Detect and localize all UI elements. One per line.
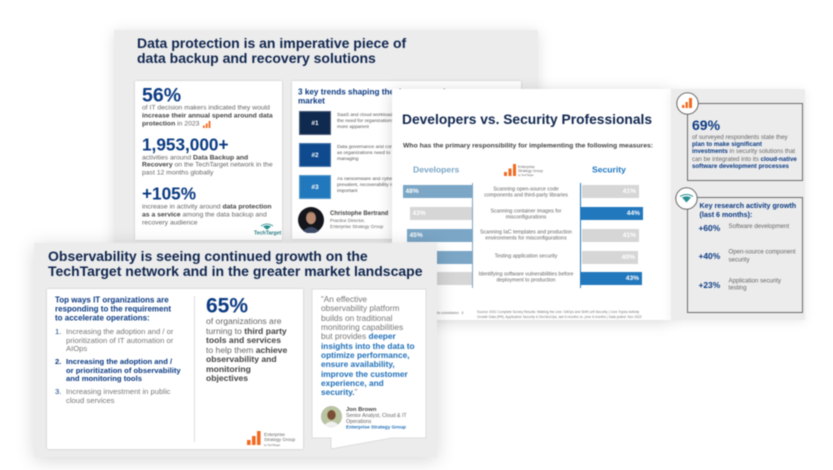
logo text [518,165,544,177]
list item 3 [55,388,180,406]
trend badge 2 [299,143,331,167]
callout heading: Key research activity growth [700,202,796,210]
logo text: by TechTarget [518,174,534,177]
quote text: insights into the data to [321,341,415,351]
item 2 text: or prioritization of observability [66,366,181,375]
callout: 69 percent: can be integrated into its cloud-native [692,155,797,162]
item 2 text: and monitoring tools [66,374,142,383]
item 3 text [66,388,178,406]
logo text: Strategy Group [264,437,295,442]
quote text: builds on traditional [321,313,392,323]
stats text: activities [142,134,273,177]
bar: 43% [581,272,642,285]
trend text 1: the need for organizations [337,119,392,124]
author role [330,218,384,230]
chart: security bars [579,182,644,289]
measure 5: deployment to production [497,278,555,284]
stat description: 65%: tools and services [206,335,281,345]
measure 2: Scanning container images for [491,208,561,214]
measures labels [478,186,574,284]
bar: identifying [407,272,472,285]
trend badge 2: #2 [311,152,319,159]
icon: orange bars [202,120,212,129]
trend text 3: important [337,189,357,194]
icon: eye [260,222,274,230]
bar: 40% [582,251,638,264]
logo text: Strategy Group [518,169,543,173]
bar: 41%: 41% [623,232,636,239]
portrait [297,206,325,234]
measure 2 [490,208,562,221]
trend text 3: prevalent, recoverability is [337,183,392,188]
value: +23%: +23% [698,279,720,289]
side panel: security insights [671,89,805,320]
callout heading: (last 6 months): [700,211,752,219]
measure 4: Testing application security [495,253,557,259]
item 1 text: AIOps [66,344,87,353]
logo: enterprise strategy group [503,163,544,177]
icon: orange bars [247,431,262,445]
item 2 number: 2. [55,357,61,366]
panel: key trends [292,81,521,239]
stat description: 65% [206,317,296,383]
trend badge 1 [299,111,331,135]
bar: 40%: 40% [622,254,635,261]
panel: key statistics [135,81,282,240]
logo text: TechTarget [254,230,281,236]
icon: eye in circle [674,186,698,210]
source text: Growth Data (RR), Application Security & DevSecOps, last 6 months vs. prior 6 months | Data pulled: Nov 2022 [477,315,642,319]
author company: Enterprise Strategy Group [346,425,406,430]
item 3 number: 3. [55,387,61,396]
label: open-source: Open-source component [728,248,796,255]
quote text: improve the customer [321,369,408,379]
trend text 1: more apparent [337,125,369,130]
bar: 41% [582,229,639,242]
slide: observability [34,243,437,457]
trend 3 [298,174,392,200]
column heading: security: Security [592,165,626,175]
trend 1 [298,110,393,136]
stats text: activities: Recovery on the TechTarget network in the [142,162,273,169]
source text: Source: ESG Complete Survey Results: Walking the Line: GitOps and Shift Left Security | Core Topics Activity [477,310,639,314]
question: Who has the primary responsibility for implementing the following measures: [403,142,653,149]
panel: ways and statistic [47,289,303,449]
title: data protection: data backup and recovery solutions [137,50,376,66]
author role [346,414,421,426]
panel: quote [311,288,427,450]
measure 3 [480,228,572,242]
measure 1: components and third-party libraries [484,193,568,199]
source text [476,310,642,320]
stat description: 65%: to help them achieve [206,344,287,354]
heading: 3 key trends: 3 key trends shaping the data protection [298,87,455,96]
copyright fragment: or its subsidiaries 6 [433,311,463,315]
footer source [433,310,642,320]
divider line [194,296,195,442]
measure 5: Identifying software vulnerabilities before [479,272,573,278]
quote text: “An effective [321,294,367,304]
trend badge 3 [299,175,331,199]
bar: 43%: 43% [412,210,426,217]
label: software development: Software development [728,223,789,230]
author role: Operations [346,419,371,425]
quote text: ensure availability, [321,359,395,369]
logo text: Enterprise [518,165,535,169]
quote text: security.” [321,387,357,397]
list item 2 [55,358,180,384]
quote text [321,295,426,405]
icon: orange bars in circle [676,92,700,116]
heading: 3 key trends [298,87,455,106]
item 2 text: Increasing the adoption and / [66,357,172,366]
measure 1 [484,186,568,199]
stat value: 56%: 56% [142,84,181,106]
chart: developers bars [402,182,474,288]
callout: 69 percent [687,103,803,181]
bar: 41%: 41% [623,188,636,195]
stats text: 105 percent: as a service among the data backup and [142,212,267,219]
measure 5 [478,271,574,284]
author name: Christophe Bertrand [330,211,388,217]
stat description: 65%: monitoring [206,364,251,374]
author role: Enterprise Strategy Group [330,224,383,228]
stat description: 65%: of organizations are [206,316,281,326]
stat description: 56%: of IT decision makers indicated they would [142,105,270,112]
slide: data protection [114,30,538,250]
label: application security [728,277,782,292]
quote text: observability platform [321,303,399,313]
stat value: 65%: 65% [206,294,248,318]
quote text: experience, and [321,378,384,388]
title: data protection [136,35,407,67]
stat description: +105%: increase in activity around data protection [142,204,272,211]
axis [472,183,473,288]
title: observability: TechTarget network and in the greater market landscape [48,262,422,278]
item 1 text: prioritization of IT automation or [66,336,173,345]
trend badge 3: #3 [311,184,319,191]
stats text: 56 percent [142,84,274,129]
stat description: 65%: objectives [206,373,248,383]
value: +60%: +60% [698,222,720,232]
column heading: developers: Developers [413,165,459,175]
heading: 3 key trends: market [298,96,325,106]
stat description: 65%: turning to third party [206,326,287,336]
label: application security: testing [728,284,746,292]
author: Christophe Bertrand [297,206,389,234]
icon: orange bars [503,163,517,177]
quote text: optimize performance, [321,350,410,360]
bar: testing [403,251,472,264]
stat value: +105%: +105% [142,183,196,203]
stats text: 56 percent: increase their annual spend around data [142,113,273,120]
measure 2: misconfigurations [506,215,546,221]
slide: developers vs security [392,89,671,320]
author role: Senior Analyst, Cloud & IT [346,413,407,419]
bar: 43% [410,207,472,220]
measure 3: Scanning IaC templates and production [480,230,572,236]
label: open-source: security [728,256,750,263]
trend 2 [298,142,392,168]
stats text: activities: past 12 months globally [142,170,213,177]
title: data protection: Data protection is an imperative piece of [137,35,406,51]
trend text 1 [336,112,393,130]
trend badge 1: #1 [311,120,319,127]
author role: Practice Director, [330,218,365,223]
item 3 text: cloud services [66,396,114,405]
bar: 48%: 48% [406,188,419,195]
bar: 44% [581,207,643,220]
axis [580,183,581,288]
item 1 text [66,327,174,353]
quote text: monitoring capabilities [321,322,403,332]
stats text: 105 percent: recovery audience [142,219,198,226]
item 1 number: 1. [55,327,61,336]
logo text: Enterprise [264,432,285,437]
stat value: 69%: 69% [692,116,720,132]
logo text [264,432,299,445]
callout heading [699,202,796,220]
title: developers vs security: Developers vs. Security Professionals [402,112,652,127]
title: observability: Observability is seeing continued growth on the [48,248,368,264]
heading: top ways: to accelerate operations: [55,314,150,322]
measure 3: environments for misconfigurations [485,236,567,242]
panel: ways and statistic: by TechTarget [264,444,280,447]
item 2 text [66,358,181,384]
item 1 text: Increasing the adoption and / or [66,327,173,336]
stat description: activities: activities around Data Backup and [142,154,248,161]
stat description: 65%: observability and [206,354,277,364]
stat value: 1,953,000+: 1,953,000+ [142,134,228,154]
measure 1: Scanning open-source code [493,187,559,193]
bar: 45% [407,229,472,242]
value: +40%: +40% [698,251,720,261]
callout: research activity growth [687,197,803,313]
label: open-source [728,248,796,264]
stats text: 56 percent: protection in 2023 [142,120,199,127]
logo: TechTarget [254,222,282,236]
callout: 69 percent: investments in security solutions that [692,148,795,155]
bar: 48% [403,185,472,198]
stats text: 105 percent [142,183,272,226]
bar: 41% [582,185,639,198]
callout: 69 percent: software development processes [692,163,789,170]
list item 1 [55,327,174,353]
heading: top ways [54,296,172,323]
stat description: 69%: of surveyed respondents state they [692,133,788,140]
quote text: but provides deeper [321,331,396,341]
author name: Jon Brown [346,407,376,413]
bar: 44%: 44% [627,210,640,217]
heading: top ways: Top ways IT organizations are [55,296,169,304]
trend text 2: as organizations need to [337,151,390,156]
trend text 3 [336,176,392,194]
portrait: Jon Brown [321,406,342,427]
author: Jon Brown [346,407,421,431]
bar: 45%: 45% [410,232,423,239]
heading: top ways: responding to the requirement [55,304,171,314]
logo: enterprise strategy group [247,431,299,445]
title: observability [47,248,423,280]
label: application security: Application security [728,277,781,284]
trend text 2: managing [337,157,358,162]
item 3 text: Increasing investment in public [66,387,170,396]
callout: 69 percent: plan to make significant [692,141,762,148]
trend text 2 [336,144,392,162]
bar: 43%: 43% [626,275,639,282]
